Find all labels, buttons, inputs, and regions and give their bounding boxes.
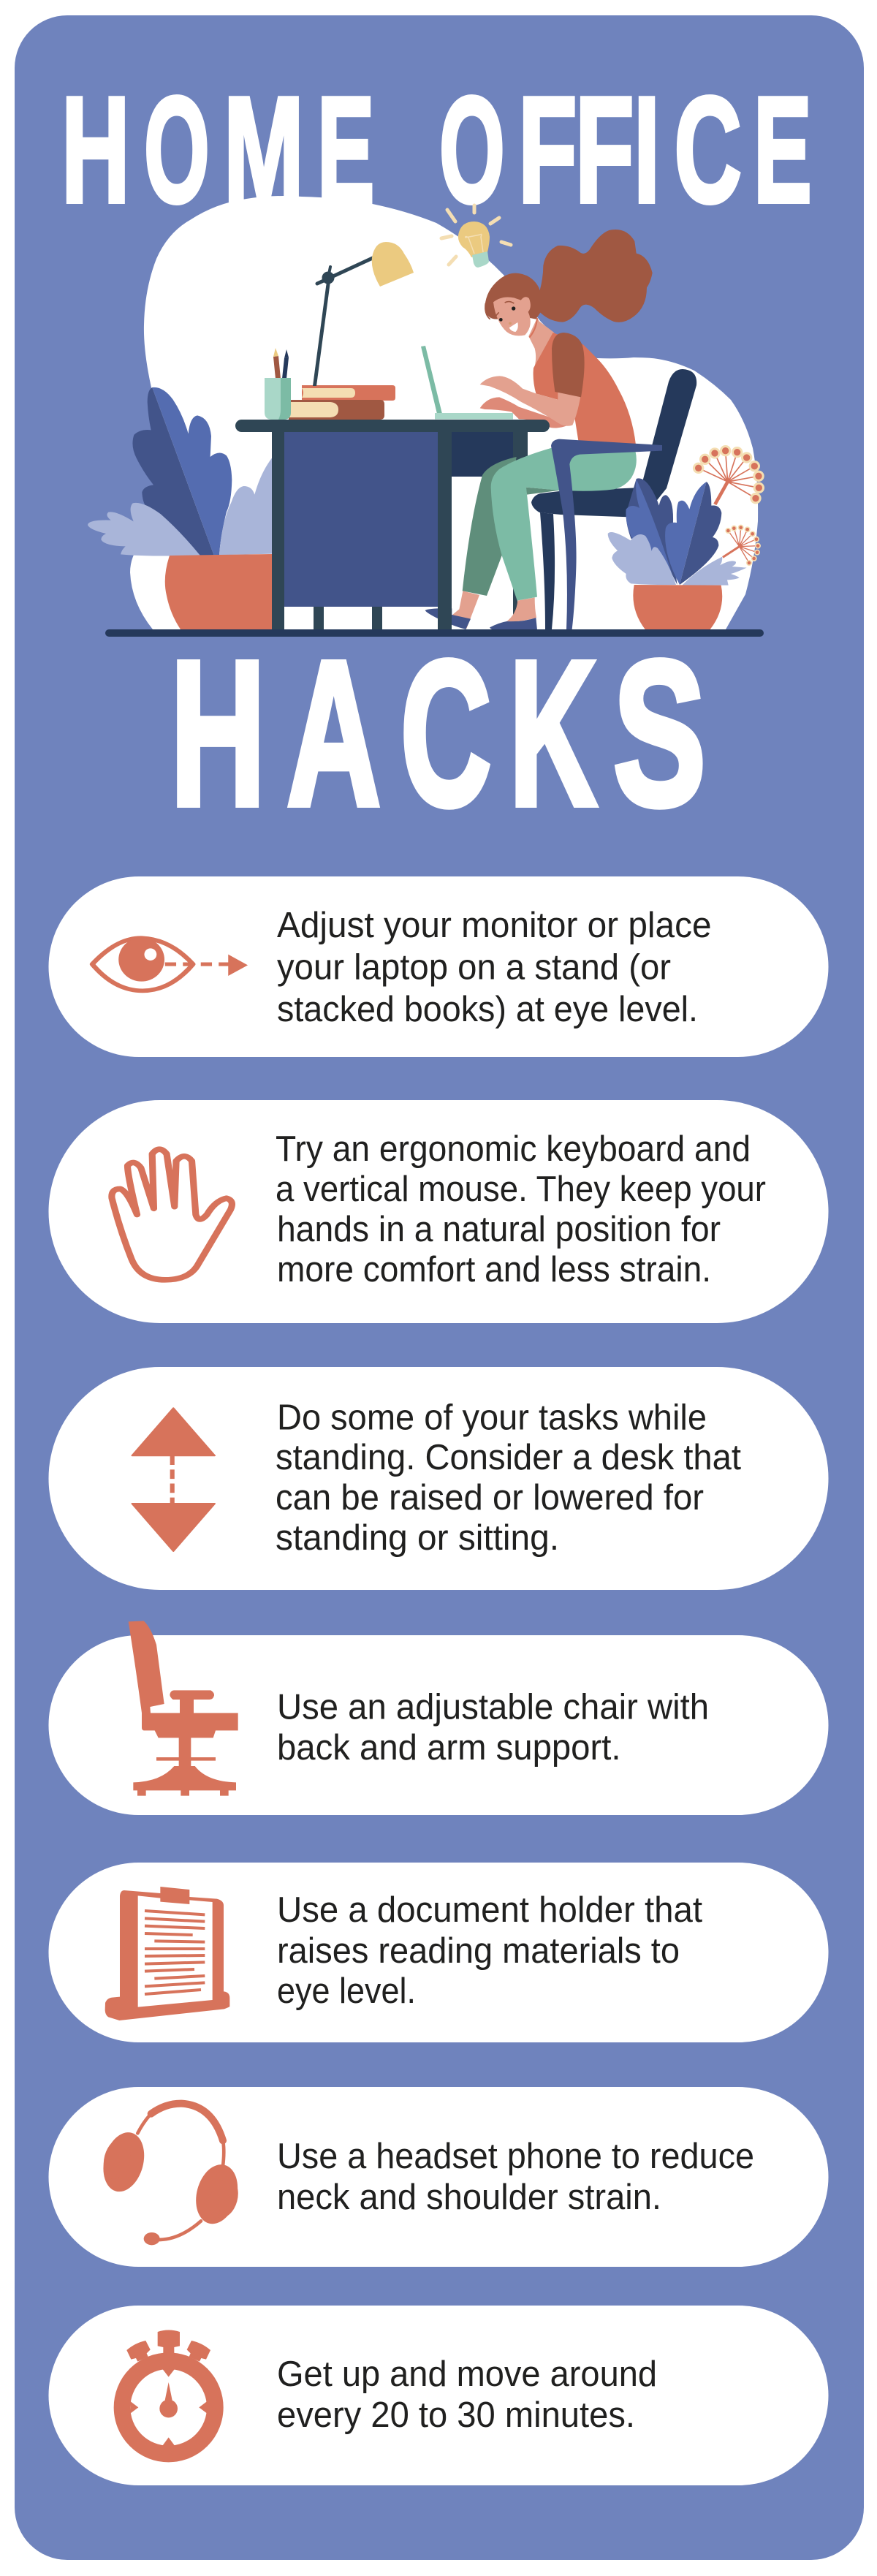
icon: up and down arrows: [132, 1408, 215, 1551]
icon: hand: [112, 1149, 232, 1280]
panel: tip 3 standing desk: [48, 1367, 829, 1590]
chair arm and front leg: [551, 439, 662, 629]
text: tip 1: your laptop on a stand (or: [277, 947, 671, 987]
text: tip 2: [276, 1129, 766, 1289]
title: HOME OFFICE: C: [674, 67, 742, 234]
woman: torso, head, hair and arms: [480, 230, 653, 444]
text: tip 7: every 20 to 30 minutes.: [277, 2395, 635, 2435]
top: [534, 333, 636, 444]
left plant: [88, 387, 272, 556]
title: HACKS: H: [170, 619, 265, 849]
text: tip 7: [277, 2355, 657, 2435]
title: HOME OFFICE: M: [224, 65, 304, 234]
desk: [235, 420, 550, 629]
panel: tip 5 document holder: [48, 1863, 829, 2042]
upper arm: [480, 376, 580, 426]
woman: legs: [425, 446, 637, 631]
title: HACKS: [170, 618, 706, 849]
desk lamp: [313, 242, 414, 386]
title: HACKS: C: [400, 619, 491, 849]
panel: tip 4 adjustable chair: [48, 1621, 829, 1815]
text: tip 5: eye level.: [277, 1971, 416, 2011]
face details: [509, 322, 518, 332]
text: tip 4: Use an adjustable chair with: [277, 1687, 709, 1727]
text: tip 2: hands in a natural position for: [277, 1210, 721, 1249]
neck: [528, 318, 554, 369]
left plant pot: [165, 554, 272, 629]
icon: headset: [97, 2104, 244, 2245]
title: HOME OFFICE: E: [753, 66, 812, 234]
chair back and seat: [531, 369, 696, 629]
title: HOME OFFICE: H: [61, 67, 130, 234]
text: tip 5: Use a document holder that: [277, 1890, 702, 1930]
white blob backdrop: [130, 196, 758, 629]
text: tip 5: raises reading materials to: [277, 1931, 680, 1971]
panel: tip 6 headset: [48, 2087, 829, 2267]
title: HOME OFFICE: O: [439, 67, 505, 234]
title: HOME OFFICE: [61, 65, 812, 234]
panel: tip 1 monitor at eye level: [48, 876, 829, 1057]
text: tip 1: [277, 906, 712, 1029]
laptop: [421, 346, 513, 420]
light bulb with rays: [441, 205, 511, 268]
text: tip 1: stacked books) at eye level.: [277, 990, 698, 1029]
icon: office chair: [129, 1621, 238, 1796]
text: tip 2: Try an ergonomic keyboard and: [276, 1129, 751, 1169]
title: HACKS: S: [613, 618, 706, 848]
panel: tip 7 move around: [48, 2306, 829, 2485]
right plant with dandelions and pot: [608, 445, 764, 629]
text: tip 5: [277, 1890, 702, 2011]
title: HOME OFFICE: O: [144, 67, 210, 234]
icon: document holder: [105, 1887, 229, 2020]
text: tip 4: back and arm support.: [277, 1728, 621, 1768]
text: tip 3: standing or sitting.: [276, 1518, 559, 1558]
title: HACKS: A: [286, 618, 381, 848]
text: tip 2: more comfort and less strain.: [277, 1250, 711, 1289]
lower arm: [480, 397, 566, 428]
panel: tip 2 ergonomic keyboard: [48, 1100, 829, 1323]
text: tip 1: Adjust your monitor or place: [277, 906, 712, 945]
text: tip 2: a vertical mouse. They keep your: [276, 1170, 766, 1209]
far side of desk: [452, 432, 528, 617]
text: tip 3: standing. Consider a desk that: [276, 1438, 741, 1477]
icon: stopwatch: [122, 2330, 215, 2454]
text: tip 3: can be raised or lowered for: [276, 1478, 704, 1518]
text: tip 4: [277, 1687, 709, 1768]
text: tip 7: Get up and move around: [277, 2355, 657, 2394]
title: HOME OFFICE: E: [317, 65, 374, 234]
text: tip 6: [277, 2137, 754, 2217]
text: tip 3: Do some of your tasks while: [277, 1398, 707, 1437]
text: tip 6: Use a headset phone to reduce: [277, 2137, 754, 2176]
title: HOME OFFICE: F: [518, 65, 577, 234]
title: HOME OFFICE: F: [575, 65, 634, 234]
pen cup with pencils: [265, 348, 291, 420]
icon: eye with dashed arrow: [92, 938, 248, 990]
head: [485, 273, 542, 319]
title: HACKS: K: [509, 618, 596, 848]
books: [289, 385, 395, 420]
text: tip 6: neck and shoulder strain.: [277, 2178, 661, 2217]
title: HOME OFFICE: I: [634, 67, 660, 234]
sleeve: [552, 333, 585, 397]
floor line: [105, 629, 764, 637]
illustration: woman working at a home office desk: [88, 196, 764, 637]
text: tip 3: [276, 1398, 741, 1558]
ponytail: [539, 230, 653, 322]
